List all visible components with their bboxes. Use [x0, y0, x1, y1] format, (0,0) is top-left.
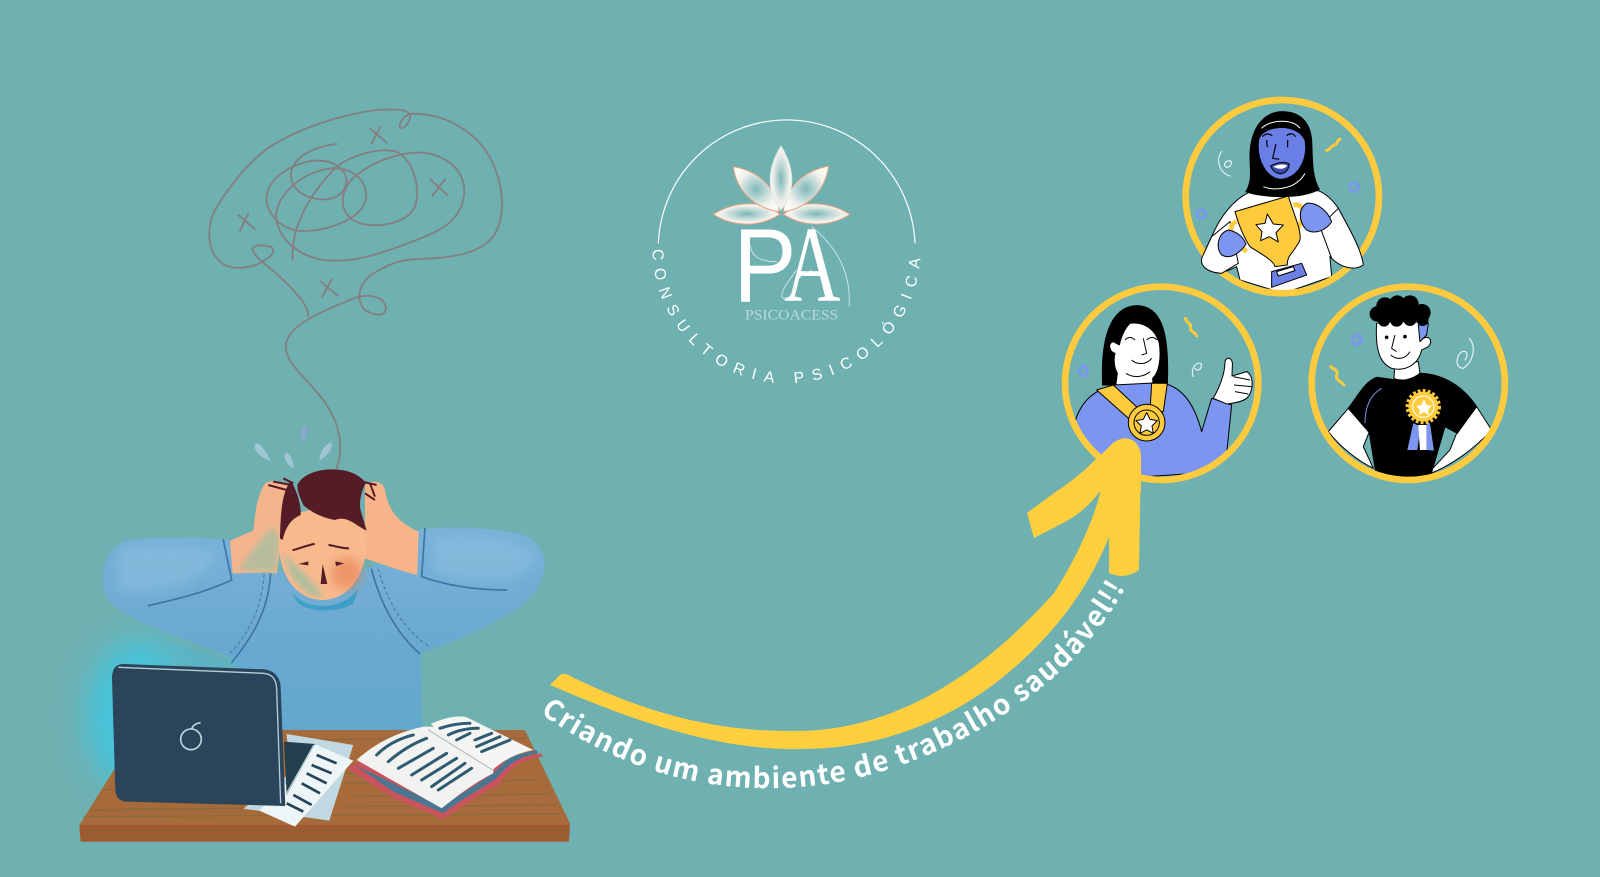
curl — [1416, 318, 1429, 326]
face features — [293, 544, 348, 550]
trophy handles — [1231, 205, 1303, 252]
drop 2 — [285, 453, 293, 468]
drop 4 — [301, 425, 308, 443]
thumbs up hand — [1213, 358, 1252, 404]
white curl — [1457, 338, 1473, 368]
head — [279, 509, 367, 600]
white curl — [1192, 363, 1201, 377]
front paper — [259, 744, 353, 827]
face — [1258, 127, 1306, 179]
finger lines — [1233, 377, 1252, 394]
drop 3 — [319, 443, 332, 461]
face and neck — [1110, 324, 1160, 384]
book gutter — [428, 730, 493, 770]
blue ring — [1353, 336, 1361, 344]
rosette ring — [1413, 396, 1434, 417]
upper left petal — [733, 167, 779, 212]
teeth — [1273, 164, 1287, 169]
yellow squiggle — [1331, 367, 1344, 385]
medal ribbon left — [1097, 385, 1140, 418]
portrait torso — [1201, 191, 1363, 293]
logo wordmark: PSICOACESS — [745, 307, 838, 323]
hijab — [1246, 112, 1319, 197]
medal star — [1136, 413, 1157, 433]
upper right petal — [783, 166, 829, 212]
sweat drops — [255, 425, 332, 468]
blue ring — [1079, 367, 1088, 375]
curl — [1390, 295, 1404, 302]
desk front edge — [79, 825, 570, 842]
book page edge — [355, 750, 538, 813]
laptop lid — [112, 664, 285, 806]
hijab highlights — [1262, 121, 1305, 189]
hair streak — [1418, 323, 1428, 342]
logo arc — [658, 120, 915, 243]
face shading — [283, 553, 323, 598]
panel: three winners — [1065, 100, 1505, 480]
hair mass — [1384, 304, 1419, 322]
hair strands in hands — [268, 478, 377, 500]
eye right — [1404, 335, 1406, 338]
desk grain — [83, 738, 567, 837]
laptop base — [284, 742, 315, 795]
trophy base — [1272, 263, 1307, 287]
confetti — [1197, 139, 1359, 218]
sweater — [103, 528, 545, 733]
portrait figure — [1075, 306, 1252, 480]
screen glow — [87, 640, 193, 793]
sweater sleeve highlights — [117, 535, 533, 592]
left hand and forearm — [230, 481, 293, 573]
rosette ribbon right — [1427, 423, 1434, 451]
neck — [1394, 362, 1420, 380]
portrait figure — [1201, 112, 1363, 287]
t-shirt — [1348, 373, 1477, 478]
arrow tip overlapping badge — [1063, 438, 1141, 492]
mouth — [1271, 162, 1289, 174]
left arm — [1201, 222, 1238, 273]
right page — [431, 717, 533, 770]
curl — [1370, 306, 1378, 322]
right hand — [1300, 203, 1332, 232]
right arm — [1320, 208, 1363, 268]
logo: Psicoacess — [652, 119, 920, 384]
portrait figure — [1328, 295, 1492, 478]
curly hair — [1370, 295, 1431, 327]
sweater seams — [148, 528, 507, 663]
paper text lines — [287, 755, 337, 812]
book — [347, 717, 543, 819]
curl — [1378, 320, 1390, 327]
laptop logo — [181, 723, 201, 750]
monogram A: A — [784, 205, 840, 325]
hair — [1102, 306, 1168, 385]
illustration: stressed man at desk — [79, 425, 570, 842]
rosette ribbons — [1407, 423, 1421, 450]
cheek blush — [332, 557, 362, 589]
icon: tangled thought scribble — [209, 109, 502, 468]
scribble knot — [267, 144, 464, 261]
face — [1376, 321, 1431, 369]
yellow squiggle — [1185, 318, 1197, 336]
sweater — [1075, 383, 1232, 480]
badge ring — [1186, 100, 1379, 293]
face lines — [1125, 337, 1157, 377]
blue ring left — [1197, 210, 1206, 218]
left hand — [1218, 230, 1246, 257]
drop 1 — [255, 444, 271, 461]
curl — [1404, 320, 1416, 326]
centre petal — [770, 146, 792, 210]
medal — [1128, 404, 1165, 441]
medal ribbon right — [1150, 383, 1167, 412]
rosette star — [1416, 399, 1432, 415]
monogram hairlines — [750, 227, 849, 307]
sleeve seam — [1365, 388, 1382, 423]
book text lines — [377, 723, 510, 790]
curl — [1404, 295, 1419, 304]
desk — [79, 730, 570, 842]
left page — [357, 727, 493, 808]
back paper — [243, 734, 353, 821]
trophy plate — [1277, 267, 1295, 276]
logo circular caption: CONSULTORIA PSICOLÓGICA — [652, 250, 920, 384]
scribble crosses — [238, 127, 447, 297]
trophy star — [1256, 214, 1283, 242]
badge ring — [1312, 287, 1505, 480]
rosette ribbon white — [1418, 425, 1427, 450]
badge: man with rosette — [1312, 287, 1505, 480]
badge: woman with trophy — [1186, 100, 1379, 293]
right hand and forearm — [365, 482, 419, 575]
badge ring — [1065, 287, 1258, 480]
lotus petals — [713, 146, 850, 224]
arrow: upward curve — [550, 438, 1141, 749]
logo arc guide — [653, 249, 921, 383]
eyes — [1385, 336, 1388, 339]
confetti — [1331, 336, 1473, 385]
curl — [1418, 304, 1431, 318]
white curl — [1219, 152, 1232, 176]
eyes and nose — [299, 561, 344, 584]
arrow caption — [544, 580, 1124, 788]
scribble outline — [209, 109, 502, 468]
medal inner ring — [1134, 410, 1159, 435]
lower right petal — [783, 204, 850, 224]
desk top — [79, 730, 570, 842]
monogram P: P — [733, 208, 796, 325]
face lines — [1391, 335, 1410, 358]
lower left petal — [713, 204, 780, 224]
laptop edge highlight — [118, 667, 314, 803]
blue ring right — [1350, 183, 1359, 191]
sweater teal shading — [160, 640, 273, 707]
collar — [290, 588, 358, 610]
book cover — [347, 742, 543, 819]
curl — [1376, 297, 1390, 306]
trophy cup — [1235, 196, 1300, 267]
badge: person with medal — [1065, 287, 1258, 480]
rosette burst — [1408, 392, 1438, 422]
left arm — [1328, 408, 1373, 468]
curl — [1390, 322, 1403, 327]
right arm — [1432, 406, 1490, 474]
yellow squiggle — [1327, 139, 1340, 151]
left forearm green tint — [238, 527, 280, 572]
confetti — [1079, 318, 1201, 377]
caption text: Criando um ambiente de trabalho saudável!! — [544, 580, 1124, 788]
caption baseline guide — [540, 550, 1145, 788]
hair — [280, 469, 367, 540]
facial features — [1262, 134, 1296, 159]
